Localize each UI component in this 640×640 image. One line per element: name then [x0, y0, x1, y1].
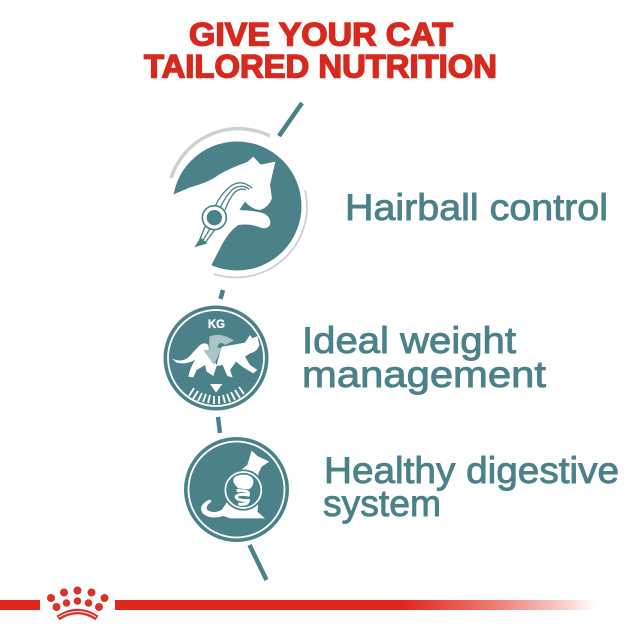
label: hairball control: Hairball control	[345, 186, 608, 228]
title: GIVE YOUR CAT	[189, 16, 453, 52]
footer bar: left	[0, 600, 40, 610]
label: ideal weight management	[302, 319, 547, 395]
hairball tract	[199, 183, 252, 243]
title: TAILORED NUTRITION	[144, 48, 497, 84]
footer bar: right fade	[115, 600, 595, 610]
icon: hairball control	[168, 129, 307, 277]
label: ideal weight management: management	[302, 353, 547, 395]
title	[144, 16, 497, 84]
KG label: KG	[208, 319, 225, 331]
connecting line segments	[218, 103, 302, 580]
label: healthy digestive system: Healthy digestive	[324, 449, 619, 491]
sitting cat silhouette	[201, 451, 269, 518]
icon: ideal weight	[164, 306, 268, 410]
cat silhouette	[168, 157, 275, 267]
grey ring arcs	[171, 129, 307, 277]
triangle marker	[210, 384, 222, 392]
label: healthy digestive system: system	[323, 482, 441, 524]
label: ideal weight management: Ideal weight	[302, 319, 517, 361]
scale ticks	[189, 387, 244, 404]
cats and arrow	[172, 335, 259, 377]
icon: royal canin crown	[47, 586, 108, 618]
icon: healthy digestive system	[184, 437, 289, 542]
label: healthy digestive system	[323, 449, 619, 524]
digestive tract lens	[223, 469, 264, 511]
